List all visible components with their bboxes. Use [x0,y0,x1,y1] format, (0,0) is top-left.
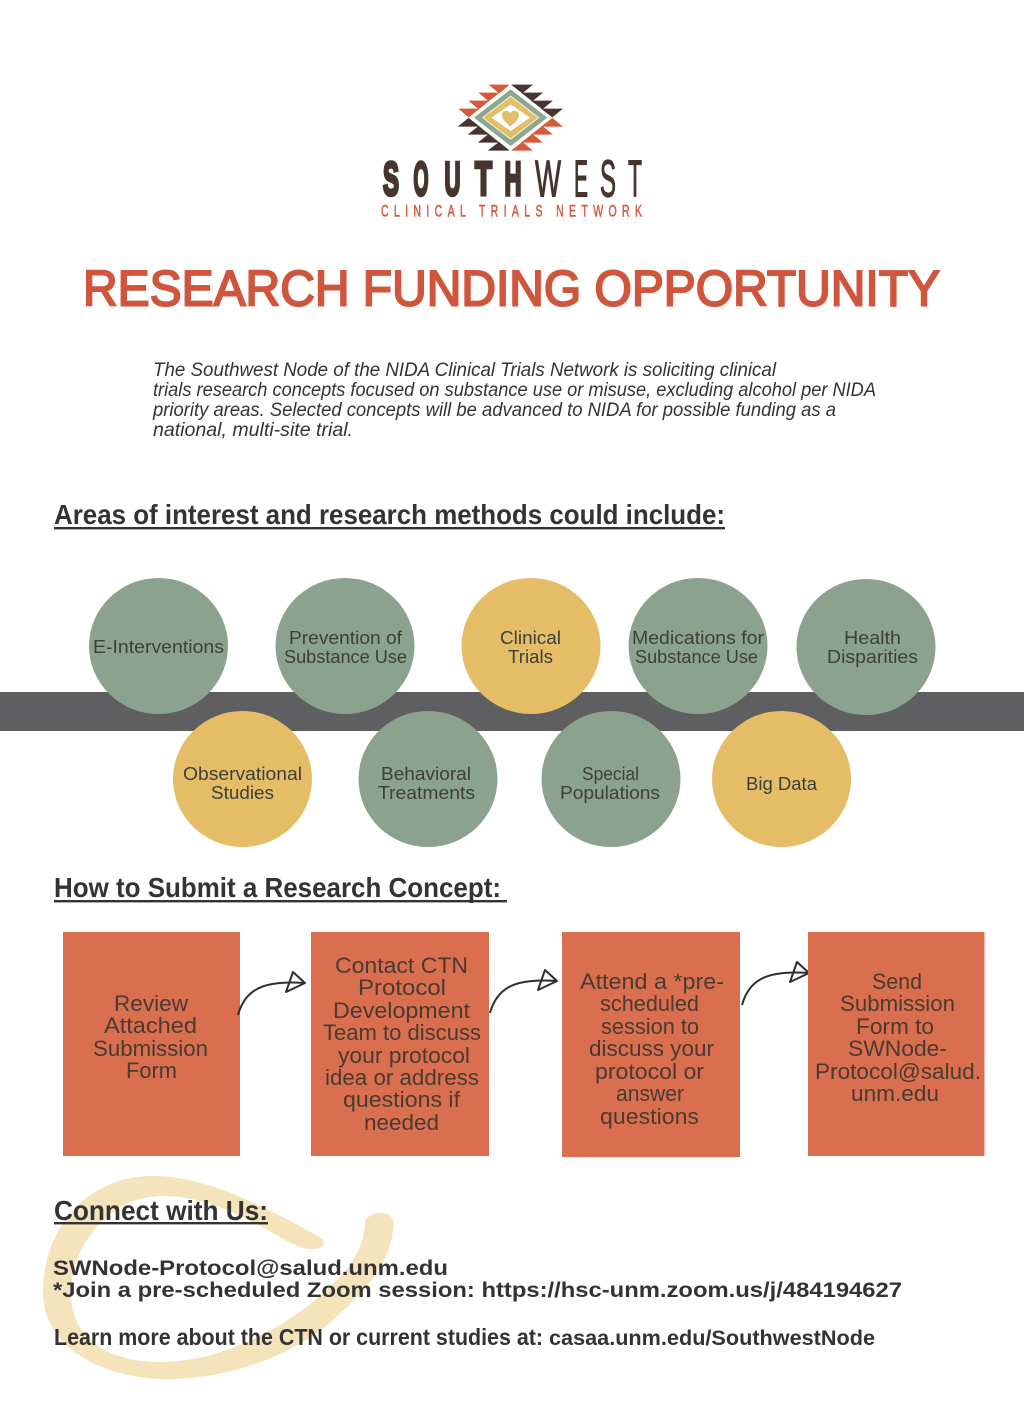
circle: Behavioral Treatments: Behavioral [381,763,471,784]
circle: Behavioral Treatments [358,711,498,847]
panel: step 2: Development [333,998,471,1023]
circle: Clinical Trials [462,578,600,714]
logo: Southwest Clinical Trials Network [381,85,642,220]
intro paragraph: The Southwest Node of the NIDA Clinical Trials Network is soliciting clinical [153,359,777,381]
logo wordmark: H [504,153,522,206]
panel: step 1: Submission [93,1036,208,1061]
circle: Big Data: Big Data [746,773,818,794]
logo wordmark [383,150,642,208]
panel: step 4: Protocol@salud. [815,1059,981,1084]
circle: Health Disparities: Health [844,627,901,648]
circle: Prevention of Substance Use: Substance Use [284,646,407,667]
intro paragraph: national, multi-site trial. [153,419,353,441]
panel: step 1: Form [126,1058,177,1083]
panel: step 3: session to [601,1014,699,1039]
contact details [53,1256,902,1350]
circle: Medications for Substance Use: Substance Use [635,646,758,667]
heading: how to submit: How to Submit a Research Concept: [54,872,501,903]
logo wordmark: E [574,150,588,208]
panel: step 3: scheduled [600,991,699,1016]
panel: step 4: SWNode- [848,1036,947,1061]
contact details: Learn more about the CTN or current studies at: [54,1324,543,1350]
logo wordmark: U [444,153,460,206]
panel: step 2: Protocol [358,975,446,1000]
heading: connect with us: Connect with Us: [54,1195,268,1226]
arrow: step 1 to step 2 [238,972,305,1015]
title: RESEARCH FUNDING OPPORTUNITY [83,260,940,316]
panel: step 4: unm.edu [851,1081,939,1106]
panel: step 4: Form to [856,1014,934,1039]
panel: areas of interest circles [89,578,936,847]
circle: Special Populations: Special [582,763,639,784]
circle: Observational Studies [173,711,312,847]
circle: Prevention of Substance Use: Prevention of [289,627,403,648]
panel: step 3: discuss your [589,1036,715,1061]
panel: step 2: idea or address [325,1065,479,1090]
arrow: step 3 to step 4 [742,962,809,1005]
intro paragraph [152,359,876,441]
circle: Observational Studies: Observational [183,763,302,784]
logo wordmark: S [600,150,616,208]
panel: step 2: your protocol [338,1043,470,1068]
circle: Special Populations: Populations [560,782,660,803]
panel: step 3 [562,932,740,1157]
panel: step 3: Attend a *pre- [580,969,724,994]
circle: Prevention of Substance Use [276,578,414,714]
heading: areas of interest: Areas of interest and research methods could include: [54,499,725,530]
circle: Big Data [712,711,851,847]
panel: step 2: questions if [343,1087,461,1112]
intro paragraph: trials research concepts focused on substance use or misuse, excluding alcohol per NIDA [153,379,876,401]
circle: Medications for Substance Use: Medications for [632,627,764,648]
panel: step 2: Contact CTN [335,953,468,978]
logo wordmark: O [414,153,428,206]
contact details: *Join a pre-scheduled Zoom session: https://hsc-unm.zoom.us/j/484194627 [53,1278,902,1302]
contact details: casaa.unm.edu/SouthwestNode [549,1326,875,1350]
arrow: step 2 to step 3 [490,970,557,1013]
circle: Health Disparities [796,579,936,715]
timeline bar [0,692,1024,731]
panel: step 3: questions [600,1104,699,1129]
intro paragraph: priority areas. Selected concepts will be advanced to NIDA for possible funding as a [152,399,836,421]
panel: step 1: Review [114,991,189,1016]
circle: Observational Studies: Studies [211,782,274,803]
panel: step 3: answer [616,1081,684,1106]
circle: Behavioral Treatments: Treatments [378,782,475,803]
circle: Clinical Trials: Trials [508,646,553,667]
circle: E-Interventions: E-Interventions [93,636,224,657]
panel: step 4: Submission [840,991,955,1016]
panel: step 4: Send [872,969,922,994]
panel: step 1: Attached [104,1013,197,1038]
logo tagline: CLINICAL TRIALS NETWORK [381,201,642,220]
circle: Health Disparities: Disparities [827,646,918,667]
contact details: SWNode-Protocol@salud.unm.edu [53,1256,448,1280]
panel: step 1 [63,932,240,1156]
logo wordmark: T [475,153,492,206]
text: T [628,150,642,208]
panel: step 2: needed [364,1110,439,1135]
panel: step 2: Team to discuss [323,1020,481,1045]
circle: Medications for Substance Use [628,578,768,714]
circle: Special Populations [542,711,680,847]
logo wordmark: S [383,153,399,206]
decorative yellow swoosh [43,1176,394,1379]
circle: Clinical Trials: Clinical [500,627,561,648]
panel: step 3: protocol or [595,1059,705,1084]
panel: step 2 [311,932,489,1156]
circle: E-Interventions [89,578,228,714]
panel: step 4 [808,932,984,1156]
icon: southwest diamond emblem [459,85,562,150]
logo wordmark: W [535,150,561,208]
